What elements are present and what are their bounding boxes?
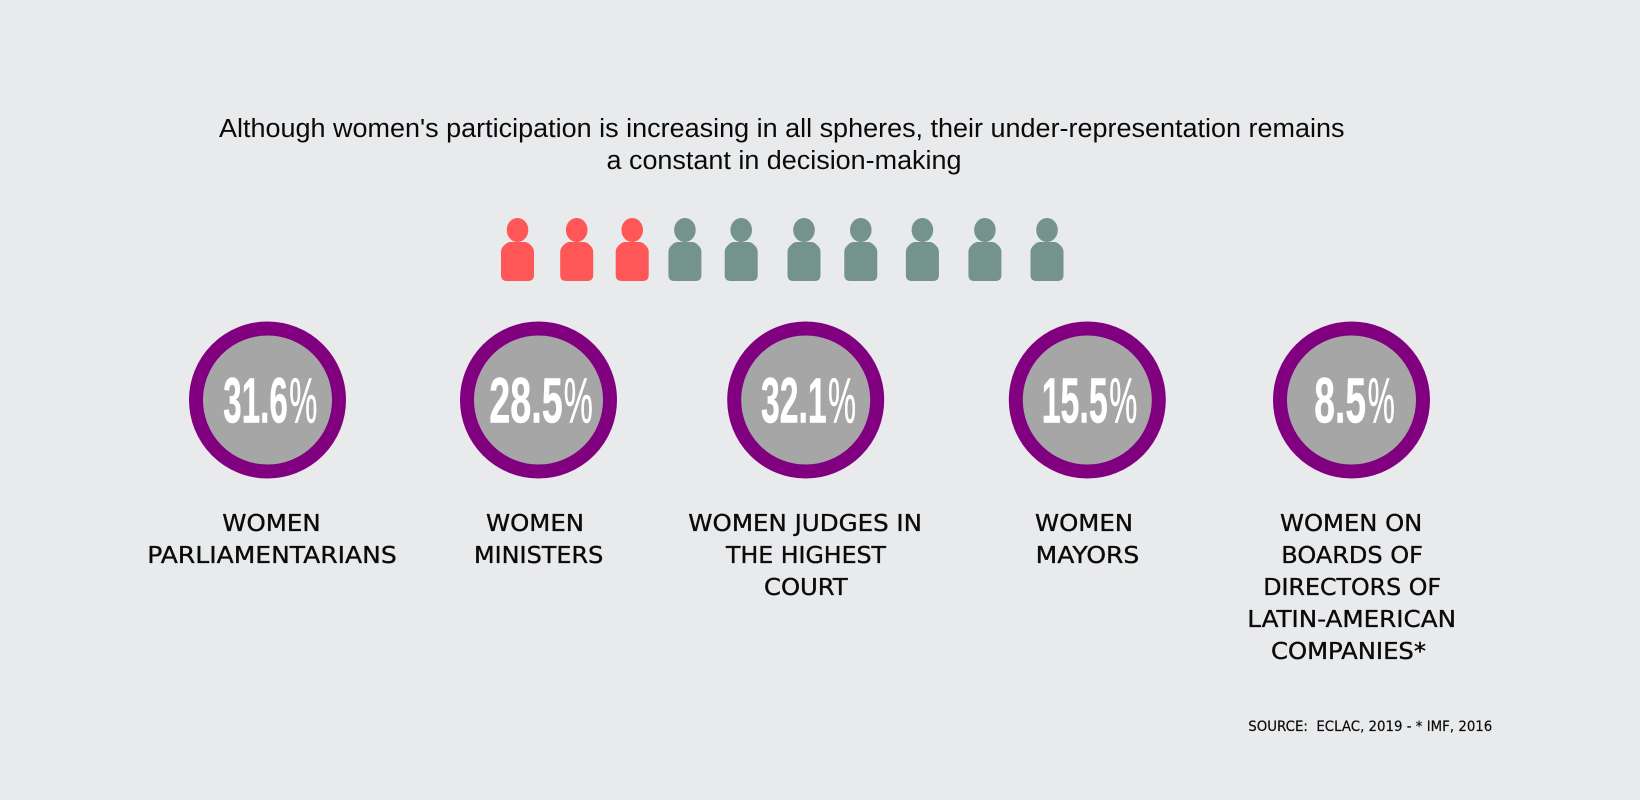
stat: women mayors: MAYORS <box>1036 543 1139 569</box>
stat: women ministers: WOMEN <box>486 511 584 537</box>
stat: women on boards: DIRECTORS OF <box>1263 575 1441 601</box>
icon: remaining people <box>668 218 1064 281</box>
stat: women judges: COURT <box>764 575 849 601</box>
stat: women judges <box>688 328 922 601</box>
stat: women parliamentarians: 31.6 <box>223 364 288 436</box>
stat: women judges: WOMEN JUDGES IN <box>688 511 922 537</box>
stat: women ministers: 28.5 <box>489 364 563 436</box>
stat: women mayors <box>1016 328 1159 569</box>
stat: women judges: THE HIGHEST <box>725 543 887 569</box>
stat: women judges: % <box>828 364 856 436</box>
source note: SOURCE: ECLAC, 2019 - * IMF, 2016 <box>1248 719 1492 735</box>
stat: women judges: 32.1 <box>761 364 827 436</box>
stat: women mayors: WOMEN <box>1035 511 1133 537</box>
stat: women parliamentarians: % <box>289 364 317 436</box>
stat: women parliamentarians: WOMEN <box>222 511 321 537</box>
title <box>219 115 1344 175</box>
stat: women mayors: 15.5 <box>1042 364 1108 436</box>
stat: women mayors: % <box>1109 364 1137 436</box>
stat: women ministers <box>467 328 610 569</box>
stat: women on boards: LATIN-AMERICAN <box>1247 607 1456 633</box>
stat: women parliamentarians <box>147 328 397 569</box>
stat: women on boards: BOARDS OF <box>1281 543 1423 569</box>
stat: women on boards: % <box>1368 364 1395 436</box>
stat: women on boards: COMPANIES* <box>1271 639 1426 665</box>
stat: women ministers: % <box>564 364 593 436</box>
title: a constant in decision-making <box>606 147 962 175</box>
stat: women parliamentarians: PARLIAMENTARIANS <box>147 543 397 569</box>
stat: women ministers: MINISTERS <box>474 543 603 569</box>
title: Although women's participation is increasing in all spheres, their under-representation remains <box>219 115 1344 143</box>
stat: women on boards: 8.5 <box>1314 364 1366 436</box>
pictogram: ten people, three highlighted <box>501 218 1064 281</box>
stat: women on boards: WOMEN ON <box>1280 511 1422 537</box>
stat: women on boards <box>1247 328 1456 665</box>
icon: highlighted people <box>501 218 649 281</box>
